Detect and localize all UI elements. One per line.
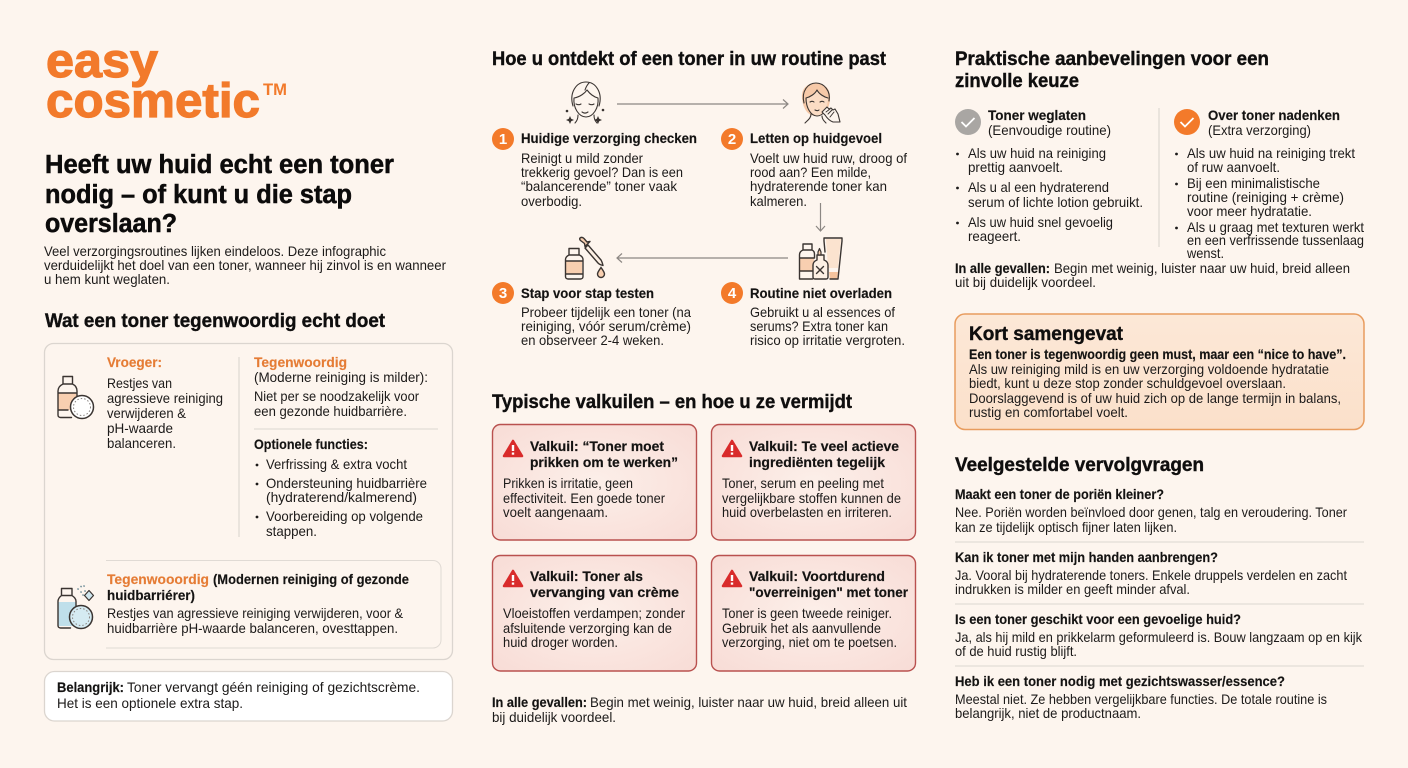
arrow: step 4 to 3 (617, 254, 788, 262)
faq 4: belangrijk, niet de productnaam. (955, 705, 1141, 721)
list: optionele functies: Voorbereiding op volgende (266, 508, 423, 524)
column: over toner nadenken: (Extra verzorging) (1208, 122, 1311, 138)
text: tegenwoordig: Niet per se noodzakelijk voor (254, 388, 419, 404)
step 2: Voelt uw huid ruw, droog of (750, 150, 907, 166)
card: te veel actieve ingrediënten: Toner, serum en peeling met (722, 475, 884, 491)
note: in alle gevallen rechts: Begin met weinig, luister naar uw huid, breid alleen (1054, 260, 1350, 276)
card: overreinigen: Gebruik het als aanvullende (722, 620, 881, 636)
step 2: kalmeren. (750, 193, 807, 209)
title (45, 151, 394, 238)
column: over toner nadenken: Over toner nadenken (1208, 108, 1340, 123)
step 4: risico op irritatie vergroten. (750, 332, 905, 348)
panel: kort samengevat: Een toner is tegenwoordig geen must, maar een “nice to have”. (969, 347, 1346, 362)
panel: kort samengevat: Doorslaggevend is of uw huid zich op de lange termijn in balans, (969, 390, 1341, 406)
note: in alle gevallen rechts: In alle gevallen: (955, 261, 1050, 276)
text: vroeger: agressieve reiniging (107, 390, 223, 406)
step 4: serums? Extra toner kan (750, 318, 888, 334)
column: toner weglaten: Als uw huid na reiniging (968, 145, 1106, 161)
card: overreinigen: Toner is geen tweede reiniger. (722, 605, 892, 621)
note: in alle gevallen rechts: uit bij duidelijk voordeel. (955, 274, 1096, 290)
heading: praktische aanbevelingen: zinvolle keuze (955, 70, 1079, 92)
card: toner als vervanging: Valkuil: Toner als (530, 568, 643, 584)
column: over toner nadenken: Bij een minimalistische (1187, 175, 1320, 191)
sub-panel: tegenwoordig modern: (Modernen reiniging of gezonde (213, 572, 409, 587)
icon: warning (723, 571, 741, 586)
icon: face with hand (802, 83, 840, 123)
panel: kort samengevat: Als uw reiniging mild is en uw verzorging voldoende hydratatie (969, 361, 1329, 377)
icon: orange check (1174, 109, 1200, 135)
text: tegenwoordig: een gezonde huidbarrière. (254, 403, 407, 419)
faq 4: Meestal niet. Ze hebben vergelijkbare functies. De totale routine is (955, 691, 1327, 707)
step 1: 1 (499, 131, 507, 148)
card: toner als vervanging (492, 556, 696, 671)
step 2: Letten op huidgevoel (750, 131, 882, 146)
card: toner als vervanging: afsluitende verzorging kan de (503, 620, 672, 636)
faq 2: indrukken is milder en geeft minder afval. (955, 581, 1190, 597)
card: toner als vervanging: huid droger worden. (503, 634, 618, 650)
card: overreinigen: "overreinigen" met toner (749, 584, 909, 600)
card: toner als vervanging: vervanging van crème (530, 584, 679, 600)
callout: belangrijk: Het is een optionele extra stap. (57, 695, 243, 711)
step 1: Reinigt u mild zonder (521, 150, 643, 166)
column: over toner nadenken: routine (reiniging + crème) (1187, 189, 1344, 205)
step 3: en observeer 2-4 weken. (521, 332, 664, 348)
column: toner weglaten: reageert. (968, 228, 1021, 244)
text: vroeger: pH-waarde (107, 420, 173, 436)
icon: blue toner bottle with sparkle (58, 586, 94, 628)
heading: veelgestelde vervolgvragen: Veelgestelde vervolgvragen (955, 454, 1204, 476)
list: optionele functies (254, 437, 427, 539)
icon: dropper bottle (566, 237, 604, 279)
list: optionele functies: stappen. (266, 523, 317, 539)
panel: kort samengevat: biedt, kunt u deze stop zonder schuldgevoel overslaan. (969, 375, 1286, 391)
card: te veel actieve ingrediënten (712, 424, 916, 540)
column: toner weglaten: (Eenvoudige routine) (988, 122, 1111, 138)
title: Heeft uw huid echt een toner (45, 151, 394, 179)
note: in alle gevallen: In alle gevallen: (492, 695, 587, 710)
heading: hoe u ontdekt: Hoe u ontdekt of een toner in uw routine past (492, 48, 886, 70)
intro text: verduidelijkt het doel van een toner, wanneer hij zinvol is en wanneer (44, 257, 446, 273)
card: overreinigen: verzorging, niet om te poetsen. (722, 634, 897, 650)
sub-panel: tegenwoordig modern: Restjes van agressieve reiniging verwijderen, voor & (107, 605, 404, 621)
faq 3: Is een toner geschikt voor een gevoelige huid? (955, 612, 1241, 627)
icon: warning (723, 441, 741, 456)
title: nodig – of kunt u die stap (45, 181, 352, 209)
arrow: step 1 to 2 (617, 100, 788, 108)
heading: praktische aanbevelingen (955, 48, 1269, 92)
text: tegenwoordig: Tegenwoordig (254, 355, 347, 370)
step 2 (721, 128, 907, 209)
panel: kort samengevat (955, 314, 1364, 430)
logo: easy cosmetic: cosmetic (46, 75, 260, 128)
card: overreinigen (712, 556, 916, 671)
text: vroeger: Vroeger: (107, 355, 162, 370)
step 3: Stap voor stap testen (521, 286, 654, 301)
card: te veel actieve ingrediënten: vergelijkbare stoffen kunnen de (722, 490, 901, 506)
faq 1: Nee. Poriën worden beïnvloed door genen, talg en veroudering. Toner (955, 504, 1347, 520)
faq 2: Ja. Vooral bij hydraterende toners. Enkele druppels verdelen en zacht (955, 567, 1347, 583)
step 2: rood aan? Een milde, (750, 164, 871, 180)
icon: warning (504, 441, 522, 456)
list: optionele functies: Verfrissing & extra vocht (266, 456, 407, 472)
card: toner moet prikken: voelt aangenaam. (503, 504, 608, 520)
column: over toner nadenken (1174, 108, 1364, 261)
heading: praktische aanbevelingen: Praktische aanbevelingen voor een (955, 48, 1269, 70)
step 4: Routine niet overladen (750, 286, 892, 301)
step 1: “balancerende” toner vaak (521, 178, 678, 194)
step 4 (721, 282, 905, 348)
column: toner weglaten: prettig aanvoelt. (968, 159, 1063, 175)
card: toner moet prikken: prikken om te werken” (530, 454, 678, 470)
faq 2: Kan ik toner met mijn handen aanbrengen? (955, 550, 1218, 565)
faq 2 (955, 550, 1347, 597)
text: vroeger: Restjes van (107, 375, 172, 391)
callout: belangrijk: Toner vervangt géén reiniging of gezichtscrème. (127, 679, 420, 695)
faq 3: Ja, als hij mild en prikkelarm geformuleerd is. Bouw langzaam op en kijk (955, 629, 1363, 645)
note: in alle gevallen: bij duidelijk voordeel. (492, 709, 616, 725)
card: toner moet prikken (492, 424, 696, 540)
column: over toner nadenken: voor meer hydratatie. (1187, 203, 1312, 219)
intro text: Veel verzorgingsroutines lijken eindeloos. Deze infographic (44, 243, 386, 259)
sub-panel: tegenwoordig modern: Tegenwooordig (107, 572, 209, 587)
text: tegenwoordig (254, 355, 428, 419)
faq 3: of de huid rustig blijft. (955, 643, 1077, 659)
note: in alle gevallen (492, 694, 907, 725)
sub-panel: tegenwoordig modern (106, 560, 441, 648)
column: over toner nadenken: en een verfrissende tussenlaag (1187, 232, 1364, 248)
text: vroeger: balanceren. (107, 435, 176, 451)
heading: typische valkuilen: Typische valkuilen – en hoe u ze vermijdt (492, 391, 852, 413)
column: over toner nadenken: Als u graag met texturen werkt (1187, 219, 1364, 235)
column: toner weglaten (955, 108, 1143, 244)
icon: warning (504, 571, 522, 586)
icon: stacked products (800, 238, 842, 279)
arrow: step 2 to 4 (816, 203, 825, 231)
icon: grey check (955, 109, 981, 135)
step 3: 3 (499, 285, 507, 302)
logo: easy cosmetic: TM (263, 80, 287, 99)
card: overreinigen: Valkuil: Voortdurend (749, 568, 885, 584)
text: tegenwoordig: (Moderne reiniging is milder): (254, 369, 428, 385)
sub-panel: tegenwoordig modern: huidbarrière pH-waarde balanceren, ovesttappen. (107, 620, 398, 636)
logo: easy cosmetic: easy (46, 35, 158, 88)
faq 4: Heb ik een toner nodig met gezichtswasser/essence? (955, 674, 1285, 689)
card: toner als vervanging: Vloeistoffen verdampen; zonder (503, 605, 685, 621)
column: toner weglaten: serum of lichte lotion gebruikt. (968, 194, 1143, 210)
step 3: Probeer tijdelijk een toner (na (521, 304, 691, 320)
step 1: Huidige verzorging checken (521, 131, 697, 146)
step 1: trekkerig gevoel? Dan is een (521, 164, 683, 180)
faq 1 (955, 487, 1347, 535)
column: toner weglaten: Als u al een hydraterend (968, 179, 1109, 195)
step 3 (492, 282, 691, 348)
card: toner moet prikken: Valkuil: “Toner moet (530, 438, 664, 454)
column: over toner nadenken: wenst. (1186, 245, 1224, 261)
step 1 (492, 128, 697, 209)
callout: belangrijk (44, 672, 452, 721)
step 4: 4 (728, 285, 737, 302)
note: in alle gevallen: Begin met weinig, luister naar uw huid, breid alleen uit (590, 694, 907, 710)
text: vroeger (107, 355, 223, 451)
step 2: 2 (728, 131, 736, 148)
list: optionele functies: Optionele functies: (254, 437, 368, 452)
card: toner moet prikken: effectiviteit. Een goede toner (503, 490, 665, 506)
list: optionele functies: (hydraterend/kalmerend) (266, 489, 417, 505)
faq 1: Maakt een toner de poriën kleiner? (955, 487, 1164, 502)
heading: wat een toner doet: Wat een toner tegenwoordig echt doet (45, 310, 385, 332)
icon: toner bottle and pad (58, 376, 94, 418)
step 3: reiniging, vóór serum/crème) (521, 318, 691, 334)
note: in alle gevallen rechts (955, 260, 1350, 290)
step 1: overbodig. (521, 193, 582, 209)
logo: easy cosmetic (46, 35, 287, 128)
step 4: Gebruikt u al essences of (750, 304, 895, 320)
card: te veel actieve ingrediënten: huid overbelasten en irriteren. (722, 504, 892, 520)
intro text (44, 243, 446, 287)
card: te veel actieve ingrediënten: ingrediënten tegelijk (749, 454, 885, 470)
faq 1: kan ze tijdelijk optisch fijner laten lijken. (955, 519, 1177, 535)
card: toner moet prikken: Prikken is irritatie, geen (503, 475, 633, 491)
faq 3 (955, 612, 1363, 659)
faq 4 (955, 674, 1327, 721)
step 2: hydraterende toner kan (750, 178, 887, 194)
panel: kort samengevat: rustig en comfortabel voelt. (969, 404, 1128, 420)
card: te veel actieve ingrediënten: Valkuil: Te veel actieve (749, 438, 899, 454)
panel: wat een toner doet (44, 344, 452, 660)
icon: calm face (566, 82, 604, 124)
text: vroeger: verwijderen & (107, 405, 187, 421)
column: over toner nadenken: of ruw aanvoelt. (1187, 159, 1280, 175)
panel: kort samengevat: Kort samengevat (969, 323, 1123, 345)
column: over toner nadenken: Als uw huid na reiniging trekt (1187, 145, 1355, 161)
callout: belangrijk: Belangrijk: (57, 680, 124, 695)
column: toner weglaten: Toner weglaten (988, 108, 1086, 123)
sub-panel: tegenwoordig modern: huidbarriérer) (107, 588, 195, 603)
list: optionele functies: Ondersteuning huidbarrière (266, 475, 427, 491)
intro text: u hem kunt weglaten. (44, 271, 170, 287)
title: overslaan? (45, 210, 177, 238)
column: toner weglaten: Als uw huid snel gevoelig (968, 214, 1113, 230)
